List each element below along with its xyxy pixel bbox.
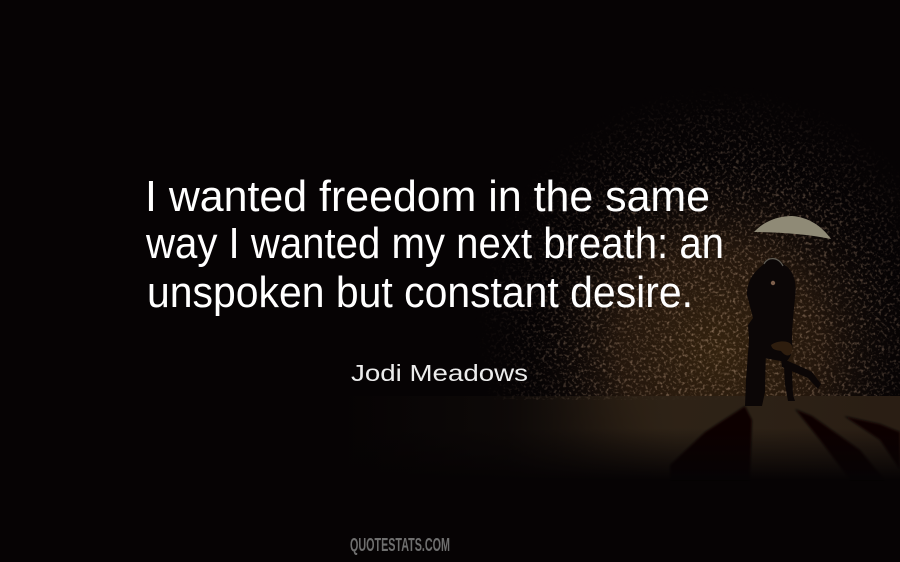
watermark: QUOTESTATS.COM bbox=[350, 535, 450, 555]
quote line 2: way I wanted my next breath: an bbox=[145, 219, 724, 268]
couple under umbrella bbox=[745, 216, 831, 406]
icon: hair highlight bbox=[764, 259, 783, 266]
quote poster bbox=[146, 100, 900, 555]
bottom fade of ground bbox=[340, 428, 900, 480]
warm glow behind couple bbox=[500, 170, 900, 470]
quote line 1: I wanted freedom in the same bbox=[145, 172, 710, 221]
falling rain texture bbox=[489, 100, 900, 400]
author name: Jodi Meadows bbox=[351, 360, 528, 386]
couple's shadows on ground bbox=[670, 406, 900, 480]
icon: face highlight bbox=[771, 281, 775, 285]
icon: embracing couple silhouette bbox=[745, 258, 821, 406]
icon: glowing dress edge bbox=[771, 341, 792, 355]
icon: umbrella bbox=[754, 216, 831, 239]
quote text bbox=[145, 172, 724, 317]
wet ground bbox=[340, 396, 900, 480]
quote line 3: unspoken but constant desire. bbox=[147, 268, 693, 317]
